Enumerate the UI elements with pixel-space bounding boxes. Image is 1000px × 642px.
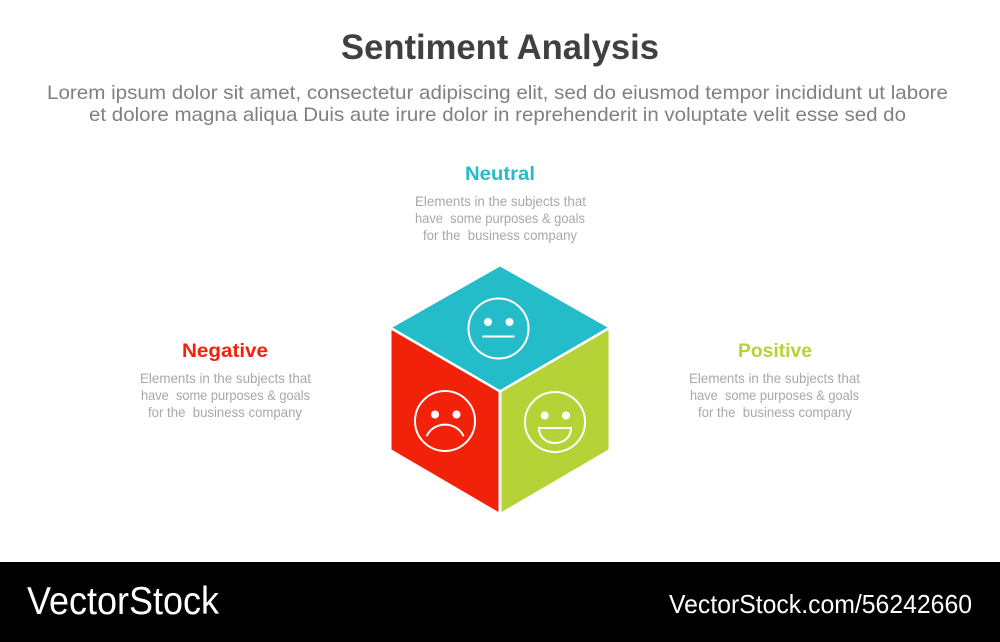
text block: positive description: have some purposes & goals	[690, 387, 859, 403]
text block: negative description	[140, 370, 311, 420]
panel: neutral label	[415, 164, 586, 243]
text block: neutral description	[415, 193, 586, 243]
text block: positive description: Elements in the subjects that	[689, 370, 860, 386]
heading: positive: Positive	[738, 341, 812, 362]
heading: neutral: Neutral	[465, 164, 535, 185]
panel: positive label	[689, 341, 860, 420]
title: Sentiment Analysis	[341, 28, 659, 67]
intro paragraph: et dolore magna aliqua Duis aute irure dolor in reprehenderit in voluptate velit esse sed do	[89, 104, 906, 126]
heading: negative: Negative	[182, 341, 268, 362]
intro paragraph: Lorem ipsum dolor sit amet, consectetur adipiscing elit, sed do eiusmod tempor incididunt ut labore	[47, 82, 948, 104]
cube face: negative	[392, 330, 498, 512]
text block: negative description: have some purposes & goals	[141, 387, 310, 403]
intro paragraph	[47, 82, 948, 126]
icon: happy face	[525, 392, 585, 452]
icon: neutral face	[468, 298, 528, 358]
text block: negative description: Elements in the subjects that	[140, 370, 311, 386]
cube face: neutral	[392, 266, 608, 390]
footer logo text: VectorStock	[27, 580, 219, 623]
cube diagram	[392, 266, 608, 512]
text block: neutral description: Elements in the subjects that	[415, 193, 586, 209]
text block: positive description: for the business company	[698, 404, 852, 420]
text block: neutral description: for the business company	[423, 227, 577, 243]
footer url text: VectorStock.com/56242660	[669, 589, 972, 619]
icon: sad face	[415, 391, 475, 451]
panel: negative label	[140, 341, 311, 420]
text block: negative description: for the business company	[148, 404, 302, 420]
text block: positive description	[689, 370, 860, 420]
footer bar	[0, 562, 1000, 642]
text block: neutral description: have some purposes & goals	[415, 210, 585, 226]
cube face: positive	[502, 330, 608, 512]
